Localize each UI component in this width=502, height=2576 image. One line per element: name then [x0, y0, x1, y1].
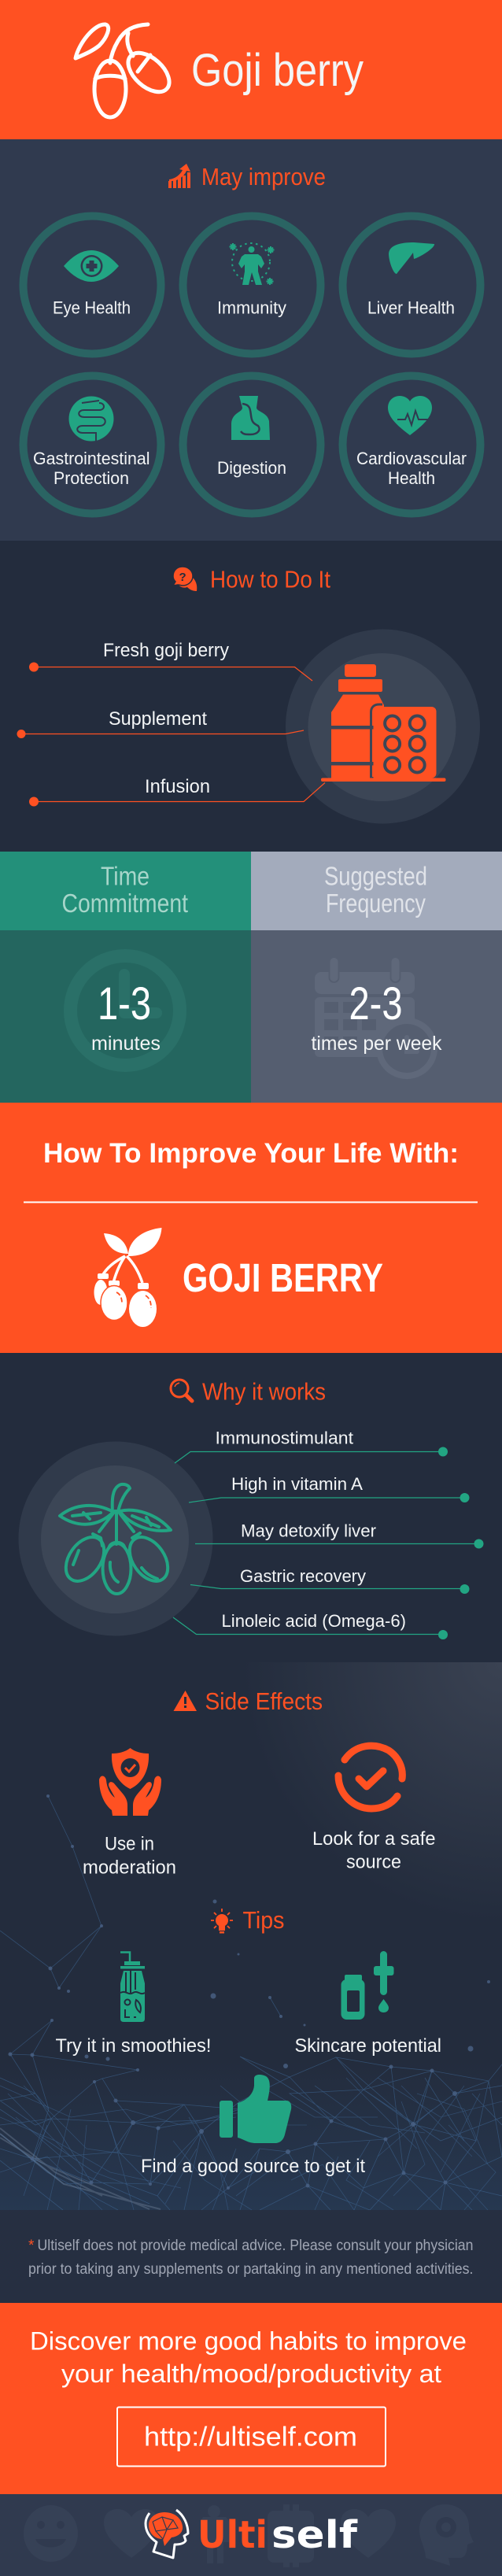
icon: rising chart [168, 164, 190, 188]
call to action text [30, 2327, 467, 2388]
icon: dropper and bottle [341, 1951, 393, 2020]
item: eye health [24, 216, 161, 354]
item: immunity: Immunity [217, 298, 286, 318]
value: 1-3 minutes: 1-3 [98, 978, 151, 1029]
callout: immunostimulant: Immunostimulant [216, 1428, 353, 1448]
value: 2-3 times per week: times per week [312, 1033, 442, 1055]
icon: question chat bubbles [173, 567, 197, 591]
heading: side effects: Side Effects [205, 1687, 323, 1715]
item: cardiovascular health [343, 376, 480, 513]
icon: goji branch outline [58, 1484, 175, 1594]
link button: http://ultiself.com [144, 2423, 357, 2452]
item: cardiovascular health: Health [388, 468, 435, 488]
icon: light bulb [211, 1909, 233, 1933]
icon: magnifier [171, 1380, 192, 1401]
item: look for a safe source [312, 1746, 436, 1873]
item: gastrointestinal protection [24, 376, 161, 513]
icon: smoothie bottle [120, 1952, 145, 2022]
value: 1-3 minutes [91, 978, 161, 1055]
item: find a good source: Find a good source to get it [141, 2156, 365, 2177]
disclaimer text: * [28, 2238, 35, 2254]
heading: may improve: May improve [201, 163, 326, 190]
diagram: goji circle [19, 1442, 212, 1635]
item: skincare potential: Skincare potential [294, 2035, 441, 2057]
icon: torso and stomach [231, 396, 270, 440]
item: look for a safe source: Look for a safe [312, 1828, 436, 1850]
icon: question chat bubbles: ? [179, 571, 186, 584]
link button [117, 2407, 386, 2467]
item: use in moderation: moderation [83, 1857, 176, 1878]
callout: infusion [29, 776, 325, 806]
callout: linoleic acid [173, 1611, 448, 1639]
heading: tips [211, 1906, 285, 1934]
icon: goji berry branch [94, 1228, 162, 1327]
item: digestion: Digestion [217, 458, 286, 478]
panel: disclaimer [0, 2210, 502, 2303]
callout: linoleic acid: Linoleic acid (Omega-6) [222, 1611, 406, 1631]
heading: time commitment: Commitment [61, 889, 188, 918]
callout: fresh goji berry [29, 640, 312, 681]
icon: heart with pulse [388, 396, 433, 435]
item: find a good source [141, 2075, 365, 2177]
item: eye health: Eye Health [53, 298, 131, 318]
icon: brain in head [146, 2510, 188, 2558]
item: liver health [343, 216, 480, 354]
panel: side effects and tips [0, 1662, 502, 2210]
panel: may improve [0, 139, 502, 541]
icon: shield and hands [99, 1748, 161, 1816]
value: 2-3 times per week: 2-3 [349, 978, 403, 1029]
value: 2-3 times per week [312, 978, 442, 1055]
diagram: supplement circle [286, 630, 480, 823]
icon: circular check [338, 1746, 402, 1809]
value: 1-3 minutes: minutes [91, 1033, 161, 1055]
item: liver health: Liver Health [367, 298, 455, 318]
callout: infusion: Infusion [145, 776, 210, 797]
heading: tips: Tips [242, 1906, 285, 1934]
heading: how to do it: How to Do It [210, 565, 330, 593]
disclaimer text: prior to taking any supplements or partaking in any mentioned activities. [28, 2261, 474, 2278]
item: try it in smoothies: Try it in smoothies! [55, 2035, 211, 2057]
item: try it in smoothies [55, 1952, 211, 2057]
heading: goji berry: GOJI BERRY [183, 1255, 383, 1300]
callout: may detoxify liver: May detoxify liver [241, 1521, 376, 1541]
callout: immunostimulant [175, 1428, 448, 1463]
item: gastrointestinal protection: Gastrointestinal [33, 449, 149, 468]
item: digestion [183, 376, 321, 513]
icon: thumbs up [220, 2075, 291, 2143]
callout: high in vitamin a [189, 1474, 469, 1502]
item: skincare potential [294, 1951, 441, 2057]
call to action text: your health/mood/productivity at [61, 2360, 441, 2388]
callout: gastric recovery: Gastric recovery [240, 1566, 366, 1586]
logo: ultiself: self [271, 2513, 358, 2557]
heading: how to improve your life with: How To Improve Your Life With: [43, 1138, 459, 1169]
panel: why it works [0, 1353, 502, 1662]
panel: how to do it [0, 541, 502, 852]
heading: time commitment: Time [101, 861, 149, 891]
heading: suggested frequency [324, 861, 427, 918]
panel: suggested frequency [251, 852, 502, 1103]
title: Goji berry [191, 45, 364, 96]
item: use in moderation [83, 1748, 176, 1878]
icon: intestines [69, 397, 113, 441]
icon: bottle and blister pack [321, 664, 445, 782]
panel: call to action [0, 2303, 502, 2494]
callout: high in vitamin a: High in vitamin A [231, 1474, 363, 1494]
disclaimer text [28, 2238, 474, 2278]
panel: time commitment [0, 852, 251, 1103]
icon: eye [64, 250, 119, 282]
icon: liver [389, 242, 434, 274]
icon: faint calendar with clock [315, 957, 434, 1076]
item: use in moderation: Use in [105, 1834, 154, 1854]
item: gastrointestinal protection: Protection [54, 468, 129, 488]
callout: may detoxify liver [195, 1521, 483, 1549]
heading: time commitment [61, 861, 188, 918]
disclaimer text: Ultiself does not provide medical advice. Please consult your physician [38, 2238, 474, 2254]
icon: faint clock [71, 955, 179, 1066]
icon: warning triangle [173, 1691, 197, 1711]
panel: how to improve your life [0, 1103, 502, 1353]
callout: supplement [17, 708, 304, 738]
heading: suggested frequency: Frequency [326, 889, 426, 918]
panel: footer [0, 2494, 502, 2576]
icon: goji berry outline [76, 24, 176, 117]
callout: supplement: Supplement [109, 708, 207, 730]
faint background icons [24, 2504, 474, 2567]
callout: fresh goji berry: Fresh goji berry [103, 640, 229, 661]
item: immunity [183, 216, 321, 354]
callout: gastric recovery [190, 1566, 469, 1594]
item: look for a safe source: source [346, 1851, 401, 1873]
logo: ultiself [146, 2510, 358, 2558]
logo: ultiself: Ulti [197, 2513, 268, 2557]
icon: immune figure [230, 243, 274, 285]
item: cardiovascular health: Cardiovascular [356, 449, 467, 468]
heading: suggested frequency: Suggested [324, 861, 427, 891]
heading: why it works: Why it works [202, 1377, 326, 1406]
call to action text: Discover more good habits to improve [30, 2327, 467, 2355]
panel: header [0, 0, 502, 139]
